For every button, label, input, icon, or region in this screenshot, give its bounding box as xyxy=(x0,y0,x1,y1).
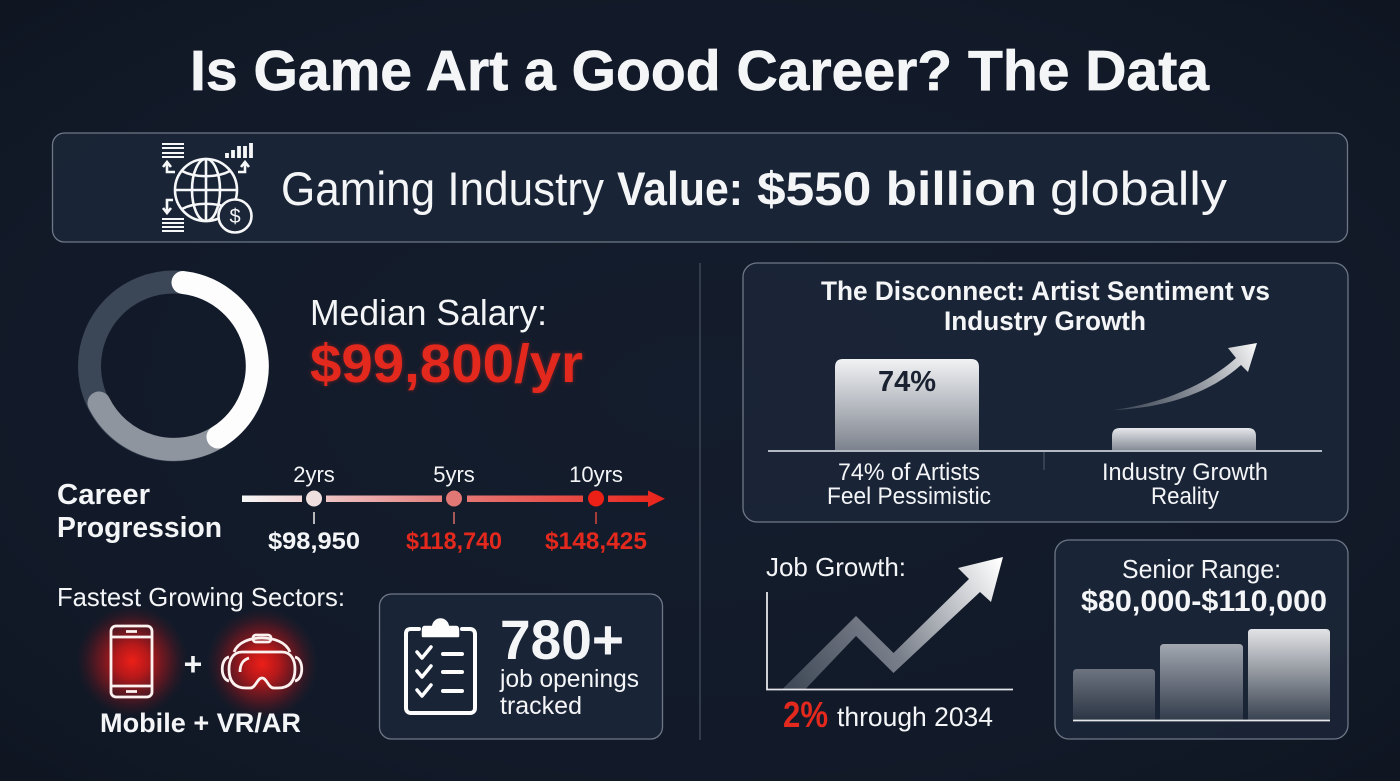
job growth chart: Job Growth: xyxy=(766,552,906,582)
sentiment label: Feel Pessimistic xyxy=(827,483,991,510)
title: Is Game Art a Good Career? The Data xyxy=(190,39,1210,103)
icon: clipboard checklist xyxy=(406,620,475,713)
banner text: $550 billion xyxy=(757,162,1037,215)
curved growth arrow xyxy=(1113,343,1257,410)
plus sign: + xyxy=(184,646,202,682)
fastest growing sectors xyxy=(57,582,345,738)
career progression timeline: 10yrs xyxy=(569,462,623,487)
median salary: Median Salary: xyxy=(310,292,547,333)
banner text: globally xyxy=(1050,162,1228,215)
sentiment label: 74% of Artists xyxy=(838,459,980,486)
job growth chart: 2% xyxy=(783,694,828,735)
panel: job openings xyxy=(380,594,662,739)
career progression label: Progression xyxy=(57,512,222,544)
career progression label: Career xyxy=(57,479,150,511)
career progression timeline: 2yrs xyxy=(293,462,335,487)
career progression timeline: $98,950 xyxy=(268,528,360,555)
fastest growing sectors: Mobile + VR/AR xyxy=(100,708,301,738)
job growth chart: through 2034 xyxy=(837,702,993,732)
career progression timeline xyxy=(242,462,665,555)
job growth chart xyxy=(766,552,1013,735)
icon: globe with data and dollar xyxy=(162,143,252,232)
panel: job openings: job openings xyxy=(499,665,639,693)
banner text: Value: xyxy=(617,162,743,215)
panel: senior range: $80,000-$110,000 xyxy=(1081,585,1327,618)
bar value: 74% xyxy=(878,366,936,398)
median salary: $99,800/yr xyxy=(310,334,583,394)
median salary: $99,800/yr xyxy=(310,334,583,394)
fastest growing sectors: Fastest Growing Sectors: xyxy=(57,582,345,612)
icon: VR headset xyxy=(222,635,302,688)
panel heading: The Disconnect: Artist Sentiment vs xyxy=(821,276,1270,306)
career progression timeline: $148,425 xyxy=(545,528,647,555)
growth label: Reality xyxy=(1151,483,1219,510)
panel heading: Industry Growth xyxy=(944,306,1146,336)
panel: the disconnect xyxy=(743,263,1348,522)
bar chart: senior range xyxy=(1073,629,1330,720)
panel: gaming industry value banner xyxy=(52,133,1348,242)
bar: artist sentiment xyxy=(835,359,979,450)
panel: job openings: tracked xyxy=(500,692,582,720)
icon: globe with data and dollar: $ xyxy=(229,206,241,228)
panel: job openings: 780+ xyxy=(500,608,624,671)
career progression timeline: $118,740 xyxy=(406,528,502,555)
career progression timeline: 5yrs xyxy=(433,462,475,487)
icon: phone xyxy=(111,626,152,697)
median salary xyxy=(310,292,583,394)
growth label: Industry Growth xyxy=(1102,459,1268,486)
banner text: Gaming Industry xyxy=(281,162,604,215)
donut chart xyxy=(90,282,258,450)
panel: senior range: Senior Range: xyxy=(1122,554,1281,584)
panel: senior range xyxy=(1055,540,1348,739)
bar: industry growth xyxy=(1112,428,1256,450)
